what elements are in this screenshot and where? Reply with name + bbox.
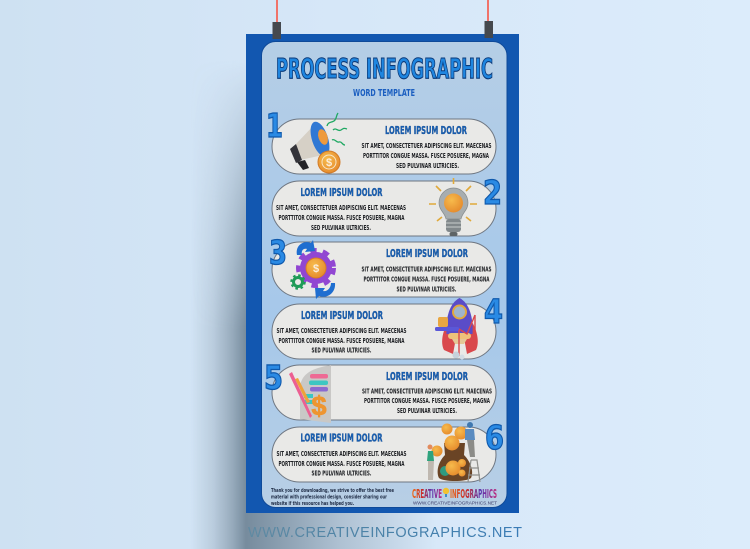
step 2: [272, 173, 502, 236]
step 2: LOREM IPSUM DOLOR: [300, 186, 383, 199]
step 1: [266, 106, 496, 174]
logo: [412, 487, 497, 506]
number 1: 1: [266, 106, 283, 145]
step 5: LOREM IPSUM DOLOR: [386, 370, 468, 383]
step 1: PORTTITOR CONGUE MASSA. FUSCE POSUERE, MAGNA: [363, 152, 489, 160]
poster shadow: [190, 60, 436, 549]
step 4: SED PULVINAR ULTRICIES.: [312, 346, 372, 354]
logo: CREATIVE: [412, 487, 442, 501]
number 5: 5: [264, 358, 283, 397]
step 2: PORTTITOR CONGUE MASSA. FUSCE POSUERE, MAGNA: [278, 214, 405, 222]
icon: money bag and people: [427, 422, 480, 482]
hanging clip left: [272, 0, 281, 39]
step 1: LOREM IPSUM DOLOR: [385, 124, 467, 137]
step 6: SIT AMET, CONSECTETUER ADIPISCING ELIT. MAECENAS: [276, 450, 406, 458]
step 2: SIT AMET, CONSECTETUER ADIPISCING ELIT. MAECENAS: [276, 204, 406, 212]
step 3: [269, 233, 496, 299]
icon: light bulb: [429, 178, 477, 236]
step 4: LOREM IPSUM DOLOR: [301, 309, 383, 322]
title: PROCESS INFOGRAPHIC: [276, 52, 493, 85]
footer note: website if this resource has helped you.: [271, 501, 354, 507]
step 6: SED PULVINAR ULTRICIES.: [312, 470, 372, 478]
icon: document with pencil and dollar: [289, 365, 331, 423]
step 3: PORTTITOR CONGUE MASSA. FUSCE POSUERE, MAGNA: [364, 276, 490, 284]
step 6: [272, 418, 504, 482]
step 1: SIT AMET, CONSECTETUER ADIPISCING ELIT. MAECENAS: [362, 142, 492, 150]
step 3: LOREM IPSUM DOLOR: [386, 247, 468, 260]
footer note: material with professional design, consider sharing our: [271, 494, 388, 500]
step 1: SED PULVINAR ULTRICIES.: [396, 162, 459, 170]
step 5: SIT AMET, CONSECTETUER ADIPISCING ELIT. MAECENAS: [362, 388, 492, 396]
number 4: 4: [484, 292, 503, 331]
step 3: SED PULVINAR ULTRICIES.: [396, 286, 456, 294]
step 6: PORTTITOR CONGUE MASSA. FUSCE POSUERE, MAGNA: [278, 460, 405, 468]
inner panel: [262, 42, 507, 508]
icon: gears: $: [313, 263, 319, 275]
step 4: SIT AMET, CONSECTETUER ADIPISCING ELIT. MAECENAS: [276, 327, 406, 335]
step 5: PORTTITOR CONGUE MASSA. FUSCE POSUERE, MAGNA: [364, 397, 490, 405]
step 6: LOREM IPSUM DOLOR: [300, 432, 383, 444]
icon: megaphone: $: [326, 157, 332, 169]
step 2: SED PULVINAR ULTRICIES.: [311, 224, 371, 232]
footer note: [271, 488, 394, 507]
footer note: Thank you for downloading, we strive to offer the best free: [271, 488, 394, 494]
step 3: SIT AMET, CONSECTETUER ADIPISCING ELIT. MAECENAS: [362, 266, 492, 274]
icon: rocket: [435, 298, 478, 360]
logo: WWW.CREATIVEINFOGRAPHICS.NET: [413, 500, 497, 506]
number 2: 2: [483, 173, 502, 212]
hanging clip right: [484, 0, 493, 38]
poster: [246, 34, 519, 513]
number 6: 6: [485, 418, 504, 457]
icon: gears: [292, 240, 335, 299]
step 4: [272, 292, 503, 360]
step 5: SED PULVINAR ULTRICIES.: [397, 407, 457, 415]
subtitle: WORD TEMPLATE: [353, 88, 415, 99]
number 3: 3: [269, 233, 287, 272]
icon: megaphone: [290, 113, 347, 173]
website url: WWW.CREATIVEINFOGRAPHICS.NET: [248, 525, 522, 541]
icon: document with pencil and dollar: $: [311, 391, 327, 421]
logo: INFOGRAPHICS: [450, 487, 497, 501]
step 5: [264, 358, 496, 423]
step 4: PORTTITOR CONGUE MASSA. FUSCE POSUERE, MAGNA: [278, 337, 405, 345]
